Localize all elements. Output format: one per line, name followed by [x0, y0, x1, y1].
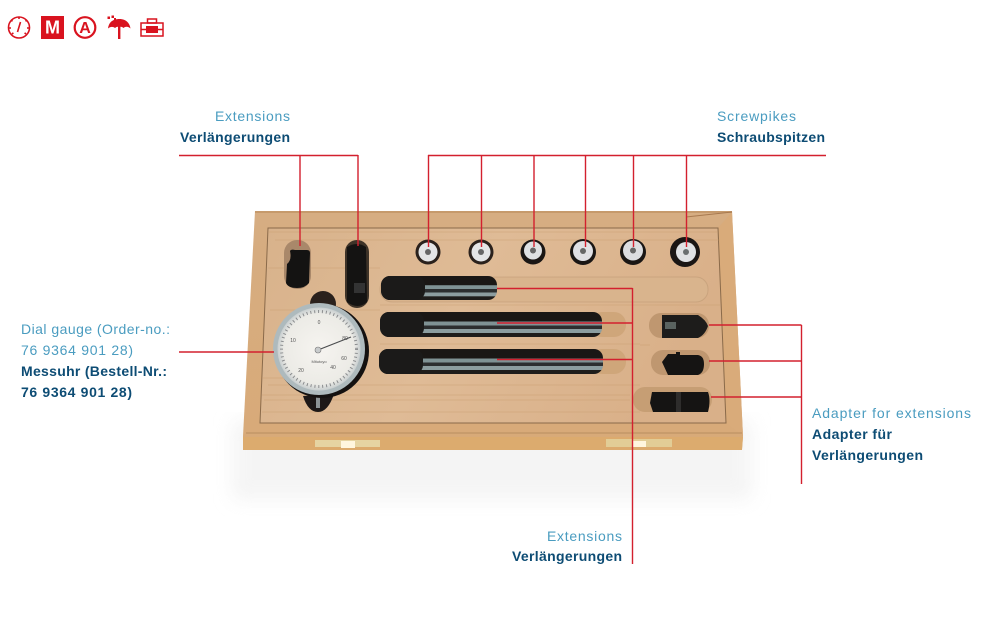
label: extensions top: Extensions	[215, 108, 290, 124]
label: dial gauge: 76 9364 901 28)	[21, 384, 132, 400]
label: screwpikes	[717, 108, 825, 145]
leader lines: extensions bottom	[497, 288, 632, 564]
gauge numbers: 10	[290, 338, 296, 344]
icon: A circle	[75, 17, 95, 38]
gauge face	[278, 308, 360, 390]
screwpikes	[416, 237, 700, 267]
gauge numbers: 40	[330, 365, 336, 371]
gauge bezel	[273, 303, 365, 395]
leader lines: adapters	[709, 325, 802, 484]
label: extensions bottom: Extensions	[547, 528, 622, 544]
icon: A circle: A	[79, 20, 91, 37]
label: dial gauge	[21, 321, 170, 400]
label: extensions top	[180, 108, 290, 145]
case outer frame	[243, 211, 743, 449]
gauge needle	[318, 337, 351, 350]
label: adapter: Adapter for extensions	[812, 405, 971, 421]
label: dial gauge: Dial gauge (Order-no.:	[21, 321, 170, 337]
label: extensions top: Verlängerungen	[180, 129, 290, 145]
icon: umbrella with rain	[108, 16, 130, 39]
screwpike 3	[520, 240, 546, 264]
label: extensions bottom	[512, 528, 622, 564]
gauge ticks	[282, 312, 356, 386]
adapter 1	[649, 313, 709, 338]
label: dial gauge: Messuhr (Bestell-Nr.:	[21, 363, 167, 379]
label: screwpikes: Screwpikes	[717, 108, 796, 124]
long rod in slot 2	[380, 312, 626, 337]
leader lines: screwpikes	[428, 155, 826, 247]
label: adapter: Adapter für	[812, 426, 893, 442]
frame highlights	[686, 212, 732, 217]
photo: wooden case	[232, 211, 752, 500]
screwpike 5	[620, 239, 646, 265]
gauge numbers	[290, 320, 348, 374]
case inner bed	[260, 228, 726, 423]
screwpike 2	[468, 240, 494, 264]
screwpike 6	[670, 237, 700, 267]
screwpike 4	[570, 239, 596, 265]
gauge numbers: 60	[341, 356, 347, 362]
leader line: dial gauge	[179, 351, 274, 353]
icon: toolbox	[141, 19, 163, 36]
gauge numbers: Mitutoyo	[311, 359, 327, 364]
gauge numbers: 20	[298, 368, 304, 374]
wood grain	[262, 232, 720, 412]
icon: dial gauge	[8, 17, 30, 38]
icon row	[8, 16, 163, 39]
adapter 2	[651, 350, 710, 375]
case front edge	[243, 437, 743, 450]
label: screwpikes: Schraubspitzen	[717, 129, 825, 145]
leader lines: extensions top	[179, 155, 358, 246]
label: dial gauge: 76 9364 901 28)	[21, 342, 133, 358]
slot: short extension 2	[345, 240, 369, 308]
label: adapter: Verlängerungen	[812, 447, 923, 463]
icon: M badge	[41, 16, 64, 39]
gauge numbers: 80	[342, 336, 348, 342]
gauge back and lugs	[310, 291, 336, 317]
icon: M badge: M	[45, 18, 60, 38]
gauge numbers: 0	[318, 320, 321, 326]
soft shadow	[232, 420, 752, 500]
label: adapter	[812, 405, 971, 463]
case right side band	[718, 212, 743, 436]
latch left	[315, 440, 380, 448]
slot: short extension 1	[284, 240, 311, 289]
dial gauge	[273, 291, 369, 412]
long rod in slot 3	[379, 349, 626, 374]
screwpike 1	[416, 240, 440, 264]
label: extensions bottom: Verlängerungen	[512, 548, 622, 564]
adapter 3	[633, 387, 712, 412]
long rod in slot 1	[380, 276, 708, 302]
latch right	[606, 439, 672, 447]
